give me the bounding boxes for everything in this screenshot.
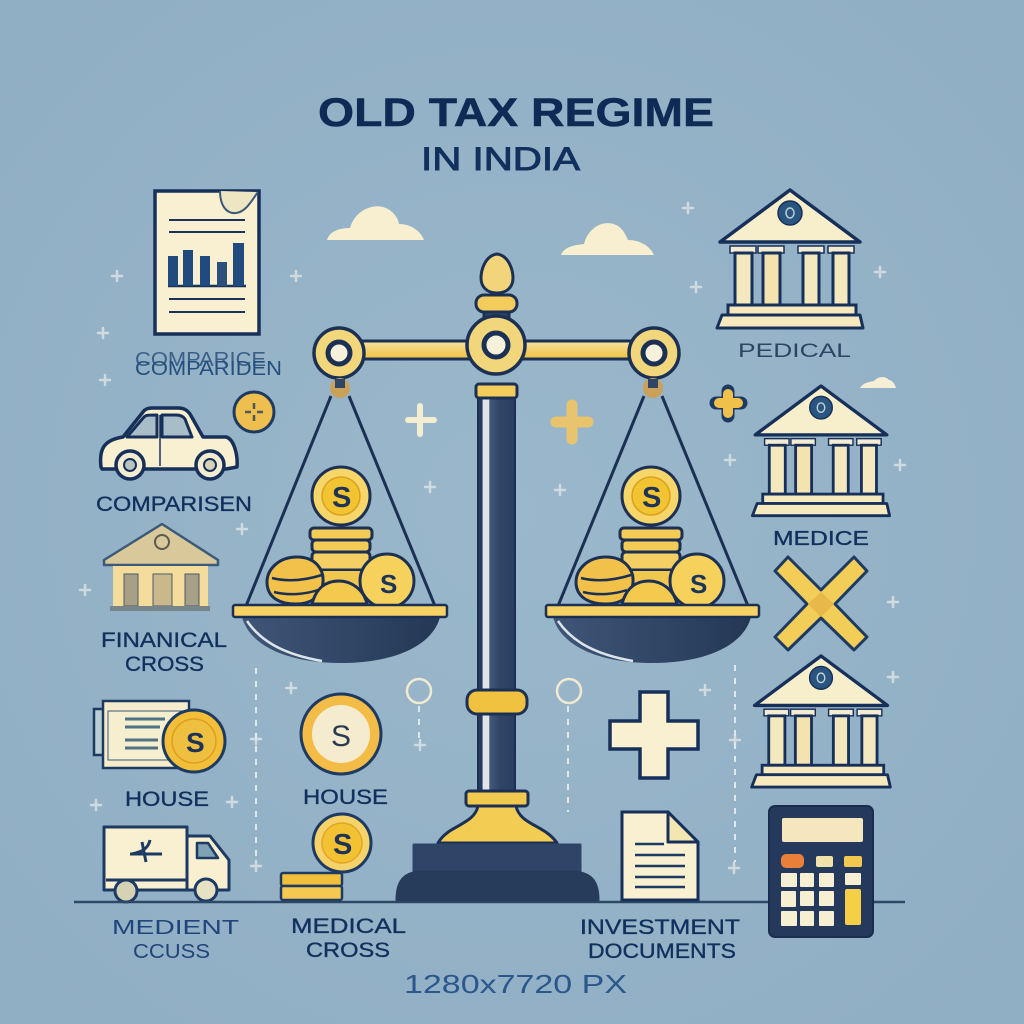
icon: small bank [104, 524, 218, 611]
icon: gold plus coin fill [719, 394, 738, 413]
label: mediant ccuss [112, 917, 239, 963]
dashed guide lines [256, 665, 735, 862]
scale [233, 254, 759, 900]
left coins: S [332, 482, 351, 514]
left pan ropes [246, 396, 435, 606]
icon: temple bottom [752, 656, 890, 787]
icon: medical plus [610, 692, 698, 778]
icon: cloud right [561, 223, 654, 255]
left coins [267, 467, 414, 608]
right coins: S [642, 482, 661, 514]
label: investment documents [580, 916, 740, 963]
decorative sparkles [80, 203, 905, 873]
icon: temple top [717, 190, 863, 328]
icon: cloud left [327, 206, 424, 240]
label: financial cross [101, 629, 227, 676]
label: financial cross: FINANICAL [101, 629, 227, 652]
icon: calculator [769, 806, 873, 937]
label: financial cross: CROSS [125, 653, 204, 676]
label: house right: HOUSE [303, 786, 388, 809]
label: mediant ccuss: CCUSS [133, 941, 210, 963]
label: compare / comparison overlap [135, 349, 282, 380]
icon: coin on stack [281, 814, 371, 900]
title: OLD TAX REGIME [318, 91, 714, 135]
label: investment documents: INVESTMENT [580, 916, 740, 939]
label: dimensions: 1280x7720 PX [404, 969, 627, 999]
label: medical cross: CROSS [306, 939, 390, 962]
label: mediant ccuss: MEDIENT [112, 917, 239, 939]
icon: document with bar chart [155, 191, 259, 334]
title: IN INDIA [421, 141, 581, 177]
label: medical cross [291, 915, 406, 962]
post [478, 392, 515, 792]
icon: gold cross X [775, 557, 867, 650]
right coins: S [690, 569, 707, 599]
right pan [546, 605, 759, 663]
title [318, 91, 714, 177]
icon: banknotes with coin [94, 701, 225, 772]
icon: cream plus left of center [408, 406, 434, 434]
label: compare / comparison overlap: COMPARIDEN [135, 358, 282, 380]
icon: large pale coin [301, 694, 381, 774]
hub and beam ends [314, 316, 679, 398]
left pan [233, 605, 447, 663]
label: compare / comparison overlap: COMPARICE [135, 349, 266, 371]
icon: car [101, 408, 237, 479]
icon: outlined circle left [407, 679, 431, 703]
icon: outlined circle right [557, 679, 581, 703]
icon: temple middle [752, 386, 890, 516]
icon: small gold coin [234, 392, 274, 432]
post collar and base [397, 690, 598, 900]
beam [355, 341, 645, 359]
icon: delivery truck [104, 827, 229, 902]
icon: document [622, 812, 698, 900]
right pan ropes [558, 396, 748, 606]
icon: gold plus coin [716, 391, 741, 416]
icon: coin on stack: S [333, 829, 352, 861]
label: investment documents: DOCUMENTS [588, 940, 736, 963]
floor line [74, 901, 905, 903]
label: pedical: PEDICAL [738, 341, 851, 362]
label: comparisen: COMPARISEN [96, 493, 252, 516]
icon: small cloud right [860, 377, 896, 388]
left coins: S [380, 569, 397, 599]
label: house left: HOUSE [125, 788, 209, 811]
icon: gold plus right of center [556, 405, 588, 439]
label: medice: MEDICE [773, 528, 869, 550]
label: medical cross: MEDICAL [291, 915, 406, 938]
right coins [576, 467, 724, 608]
finial [476, 254, 517, 318]
icon: banknotes with coin: S [186, 727, 205, 758]
icon: large pale coin: S [331, 720, 351, 753]
